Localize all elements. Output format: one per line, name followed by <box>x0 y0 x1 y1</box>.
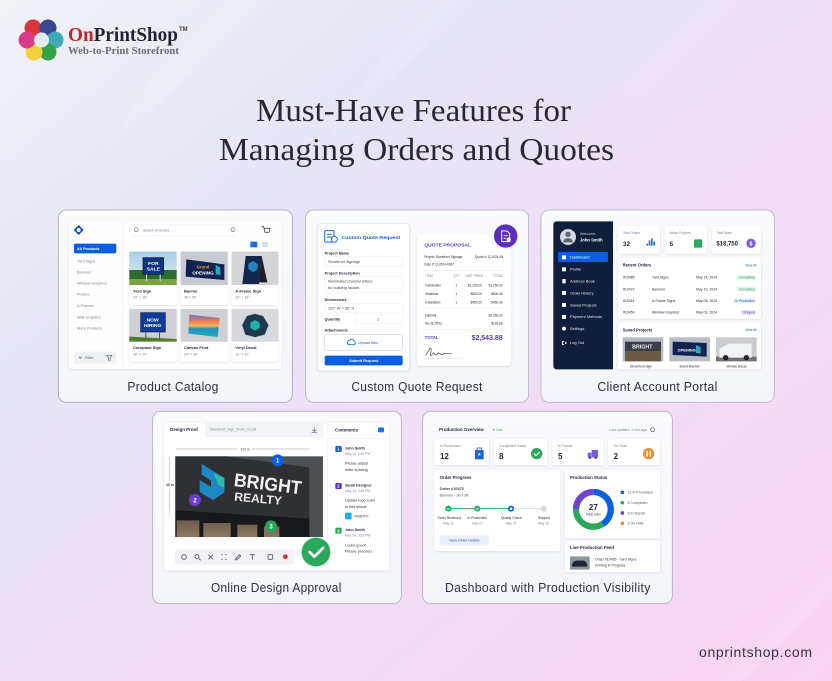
marker 3 <box>265 520 277 532</box>
recent orders table: #10461 <box>623 299 635 303</box>
stat: total spent: $18,750 <box>716 242 739 248</box>
recent orders table: Recent Orders <box>623 263 652 268</box>
dark sidebar: Dashboard <box>570 255 589 260</box>
quote proposal document: 1 <box>455 292 457 296</box>
icon: document badge <box>494 224 517 248</box>
dark sidebar: Payment Methods <box>570 314 602 319</box>
quote request form <box>318 224 409 371</box>
upload box: Upload files <box>358 341 378 345</box>
order progress: May 12 <box>472 521 483 525</box>
dark sidebar: Log Out <box>570 340 585 345</box>
comment 2: Sarah Designer <box>345 483 372 487</box>
stat: on hold: 2 <box>614 452 619 461</box>
quote proposal document: 1 <box>455 283 457 287</box>
recent orders table: View All <box>745 264 757 268</box>
view toggles <box>250 242 268 247</box>
quote proposal document: QTY <box>453 274 460 278</box>
proof toolbar <box>170 423 323 437</box>
comments column: Comments <box>335 428 359 433</box>
stat: active projects: 5 <box>670 241 674 248</box>
sidebar categories: All Products <box>77 247 100 251</box>
recent orders table: Completed <box>739 287 755 291</box>
sidebar categories <box>74 244 116 364</box>
recent orders table: In Production <box>735 299 755 303</box>
height dimension <box>166 456 174 515</box>
order progress: May 11 <box>443 521 454 525</box>
title: Managing Orders and Quotes <box>219 131 614 167</box>
sign logo <box>200 464 224 500</box>
panel: Dashboard with Production Visibility <box>423 411 672 604</box>
comment 3: 3 <box>337 528 340 533</box>
logo tagline: Web-to-Print Storefront <box>68 46 180 57</box>
order progress: Order #10472 <box>440 487 464 491</box>
order progress: Shipped <box>538 516 550 520</box>
stat: total orders: 32 <box>623 241 631 248</box>
storefront sign photo: BRIGHT <box>233 469 303 498</box>
live production feed: Live Production Feed <box>570 545 614 550</box>
sidebar categories: Yard Signs <box>77 259 96 263</box>
quote proposal document: Fabrication <box>425 283 441 287</box>
stat: in production: 12 <box>440 452 449 461</box>
quote proposal document: ITEM <box>425 274 433 278</box>
comment 2: Update logo color <box>345 499 376 503</box>
stat: total orders: Total Orders <box>623 231 641 235</box>
marker 1: 1 <box>276 459 280 465</box>
quote request form: Quantity <box>325 318 341 322</box>
recent orders table: #10450 <box>623 311 635 315</box>
sidebar categories: Wall Graphics <box>77 315 101 319</box>
recent orders table: Banners <box>652 287 665 291</box>
donut chart <box>576 492 611 527</box>
quote proposal document: TOTAL <box>425 335 439 340</box>
product: yard sign: SALE <box>147 267 161 273</box>
proof toolbar: Design Proof <box>170 427 198 432</box>
recent orders table: #10472 <box>623 287 635 291</box>
label: Online Design Approval: Online Design Approval <box>211 581 342 595</box>
avatar <box>560 229 576 245</box>
saved projects: OPENING <box>677 348 696 353</box>
production status donut <box>565 470 660 539</box>
label: Client Account Portal: Client Account Portal <box>597 380 718 394</box>
sidebar categories: Filter <box>85 356 94 360</box>
order progress <box>434 470 560 551</box>
quote request form: Project Name <box>325 251 349 255</box>
live production feed: Printing in Progress <box>595 564 626 568</box>
product: yard sign: FOR <box>148 261 159 267</box>
storefront sign photo <box>175 456 323 537</box>
quote request form: 120" W × 36" H <box>328 306 354 310</box>
saved projects: Saved Projects <box>623 327 653 332</box>
recent orders table: Completed <box>739 276 755 280</box>
product: canvas print <box>181 309 228 362</box>
comment 3 <box>335 528 373 554</box>
quote proposal document: $2,543.88 <box>472 335 503 342</box>
donut legend: 12 In Production <box>628 491 653 495</box>
stat: in transit: In Transit <box>558 444 572 448</box>
dark sidebar <box>553 221 613 369</box>
saved projects <box>618 323 761 369</box>
order progress: Quality Check <box>501 516 522 520</box>
stat: on hold: On Hold <box>614 444 627 448</box>
dark sidebar: Profile <box>570 266 582 271</box>
marker 2 <box>189 494 201 506</box>
icon: catalog logo <box>74 225 84 235</box>
recent orders table: Shipped <box>743 311 755 315</box>
sidebar categories: Banners <box>77 270 91 274</box>
product: coroplast sign: Coroplast Sign <box>133 345 162 350</box>
quote proposal document: $450.00 <box>471 301 482 305</box>
label: Custom Quote Request: Custom Quote Request <box>351 380 483 394</box>
comment 1: Please adjust <box>345 462 369 466</box>
stat: in transit: 5 <box>558 452 563 461</box>
overview header: Last updated: 2 min ago <box>609 428 647 432</box>
dark sidebar: Address Book <box>570 278 595 283</box>
marker 3: 3 <box>269 525 273 531</box>
dark sidebar: Settings <box>570 326 584 331</box>
comment 1: letter spacing <box>345 468 368 472</box>
product: vinyl decal: Vinyl Decal <box>235 345 257 350</box>
quote request form: 1 <box>377 318 379 322</box>
order progress: View Order Details <box>449 539 480 543</box>
quote proposal document: $600.00 <box>491 292 503 296</box>
quote proposal document: Project: Storefront Signage <box>424 255 462 259</box>
comment 2: 2 <box>337 484 340 489</box>
product: canvas print: 24" × 36" <box>184 352 199 356</box>
product: coroplast sign: NOW <box>147 317 159 323</box>
storefront sign photo: REALTY <box>234 490 282 508</box>
quote proposal document: 1 <box>455 301 457 305</box>
order progress: May 15 <box>506 521 516 525</box>
panel: Online Design Approval <box>153 411 401 604</box>
recent orders table: May 08, 2024 <box>696 299 717 303</box>
quote proposal document: $1,250.00 <box>468 283 482 287</box>
product: banner <box>181 252 228 305</box>
quote proposal document <box>417 234 511 366</box>
stat: completed today: Completed Today <box>499 444 526 448</box>
icon: cart <box>262 227 270 232</box>
stat: in transit <box>552 439 604 465</box>
stat: active projects: Active Projects <box>670 231 691 235</box>
website URL: onprintshop.com <box>699 644 812 660</box>
live production feed <box>565 540 660 572</box>
stat: total spent: $ <box>750 241 753 247</box>
saved projects: Storefront Sign <box>630 364 652 368</box>
order progress: May 16 <box>538 521 549 525</box>
quote proposal document: Date #: Q-2024-0087 <box>424 262 454 266</box>
quote proposal document: $193.88 <box>491 321 503 325</box>
product: coroplast sign: HIRING <box>144 323 162 329</box>
stat: in production: In Production <box>440 444 461 448</box>
stat: on hold <box>608 439 660 465</box>
proof toolbar: Storefront_Sign_Proof_v2.pdf <box>210 428 256 432</box>
recent orders table: May 14, 2024 <box>696 276 717 280</box>
quote request form: Illuminated channel letters <box>328 280 373 284</box>
comment 3: Looks good! <box>345 543 366 547</box>
title: Must-Have Features for <box>256 92 571 128</box>
quote request form: Custom Quote Request <box>341 235 401 241</box>
panel: Product Catalog <box>58 210 292 402</box>
quote proposal document: Installation <box>425 301 441 305</box>
icon: form <box>325 231 337 242</box>
stat: active projects <box>665 226 707 254</box>
quote request form: Project Description <box>325 271 360 275</box>
comment 3: Please proceed. <box>345 550 373 554</box>
quote proposal document: Quote #: Q-2024-08 <box>475 255 503 259</box>
stat: total spent <box>712 226 761 254</box>
panel: Custom Quote Request <box>306 210 529 402</box>
markup tools <box>175 549 294 564</box>
quote proposal document: QUOTE PROPOSAL <box>424 243 471 249</box>
comment 1 <box>335 446 370 472</box>
product: a-frame sign <box>232 252 278 305</box>
product: yard sign <box>129 252 177 305</box>
comment 3: May 14, 3:15 PM <box>345 534 370 538</box>
quote proposal document: $600.00 <box>471 292 482 296</box>
saved projects: BRIGHT <box>632 345 653 351</box>
sidebar categories: Posters <box>77 293 90 297</box>
live production feed: Order #10485 - Yard Signs <box>595 557 637 561</box>
comment 1: 1 <box>337 447 340 452</box>
logo wordmark: OnPrintShop <box>68 24 178 46</box>
signature <box>425 348 452 356</box>
product: canvas print: Canvas Print <box>184 345 209 350</box>
dark sidebar: John Smith <box>580 237 603 242</box>
logo: OnPrintShop <box>18 20 188 60</box>
upload box <box>325 335 403 350</box>
saved projects: Vehicle Decal <box>726 364 747 368</box>
marker 1 <box>272 454 284 466</box>
sidebar categories: A-Frames <box>77 304 94 308</box>
product: banner: Grand <box>197 264 210 269</box>
width dimension: 120 in <box>240 447 250 451</box>
product: a-frame sign: A-Frame Sign <box>235 288 262 293</box>
product: vinyl decal: 12" × 12" <box>235 352 250 356</box>
quote proposal document: Materials <box>425 292 439 296</box>
donut legend: 5 In Transit <box>628 511 645 515</box>
stat: completed today <box>494 439 548 465</box>
recent orders table: #10485 <box>623 276 635 280</box>
recent orders table: Yard Signs <box>652 276 669 280</box>
height dimension: 36 in <box>166 483 174 487</box>
quote proposal document: $1,250.00 <box>489 283 503 287</box>
stat: in production <box>434 439 489 465</box>
marker 2: 2 <box>193 498 197 504</box>
product: coroplast sign: 18" × 24" <box>133 352 148 356</box>
product: yard sign: Yard Sign <box>133 288 152 293</box>
trademark: TM <box>179 27 188 33</box>
saved projects: View All <box>745 328 757 332</box>
order progress: Order Received <box>437 516 461 520</box>
quote proposal document: TOTAL <box>493 274 503 278</box>
recent orders table: Window Graphics <box>652 311 680 315</box>
recent orders table <box>618 258 761 319</box>
width dimension <box>176 447 310 451</box>
comment 3: John Smith <box>345 528 365 532</box>
quote request form: for building facade. <box>328 286 360 290</box>
comment 1: John Smith <box>345 446 365 450</box>
quote proposal document: Subtotal <box>425 314 437 318</box>
donut legend: 8 Completed <box>628 501 647 505</box>
comment 2: #00B7FF <box>354 514 369 518</box>
label: Dashboard with Production Visibility: Dashboard with Production Visibility <box>445 581 651 595</box>
product: vinyl decal <box>232 309 278 362</box>
quote request form: Storefront Signage <box>328 260 360 264</box>
stat: completed today: 8 <box>499 452 504 461</box>
overview header <box>439 427 655 432</box>
comment 2: May 14, 2:45 PM <box>345 489 370 493</box>
sidebar categories: More Products <box>77 327 102 331</box>
sidebar categories: Window Graphics <box>77 282 107 286</box>
overview header: Production Overview <box>439 427 484 432</box>
production status donut: 27 <box>589 503 598 512</box>
comment 2 <box>335 483 376 519</box>
quote request form: Dimensions <box>325 298 346 302</box>
search bar <box>130 225 238 236</box>
saved projects: Event Banner <box>680 364 701 368</box>
dark sidebar: Saved Projects <box>570 302 597 307</box>
quote request form: Attachments <box>325 329 348 333</box>
recent orders table: May 10, 2024 <box>696 287 717 291</box>
recent orders table: May 03, 2024 <box>696 311 717 315</box>
stat: total spent: Total Spent <box>716 231 732 235</box>
overview header: Live <box>496 428 503 432</box>
product: banner: OPENING <box>192 270 214 275</box>
submit button <box>325 356 403 365</box>
comments column <box>327 423 389 571</box>
donut legend: 2 On Hold <box>628 522 643 526</box>
comment 1: May 14, 2:30 PM <box>345 452 370 456</box>
icon: approval check <box>302 538 330 566</box>
panel: Client Account Portal <box>541 210 774 402</box>
recent orders table: A-Frame Signs <box>652 299 675 303</box>
label: Product Catalog: Product Catalog <box>127 380 219 394</box>
product: a-frame sign: 24" × 36" <box>235 296 250 300</box>
production status donut: Total Jobs <box>586 512 601 516</box>
order progress: In Production <box>468 516 487 520</box>
quote proposal document: UNIT PRICE <box>465 274 483 278</box>
product: banner: Banner <box>184 288 198 293</box>
order progress: Order Progress <box>440 475 472 480</box>
title <box>219 92 614 167</box>
search bar: Search products... <box>143 228 172 232</box>
dark sidebar: Order History <box>570 290 594 295</box>
donut legend <box>620 490 653 526</box>
order progress: Banners - 3ft x 6ft <box>440 493 469 497</box>
production status donut: Production Status <box>570 475 608 480</box>
product: coroplast sign <box>129 309 177 362</box>
submit button: Submit Request <box>349 359 379 363</box>
product: yard sign: 24" × 18" <box>133 296 148 300</box>
quote proposal document: $2,350.00 <box>489 314 503 318</box>
quote proposal document: Tax (8.25%) <box>425 321 442 325</box>
product: banner: 3ft × 6ft <box>184 296 196 300</box>
stat: total orders <box>618 226 660 254</box>
icon: flower logo <box>18 20 64 60</box>
dark sidebar: Welcome, <box>580 232 596 236</box>
quote proposal document: $450.00 <box>491 301 503 305</box>
comment 2: to this shade <box>345 505 367 509</box>
